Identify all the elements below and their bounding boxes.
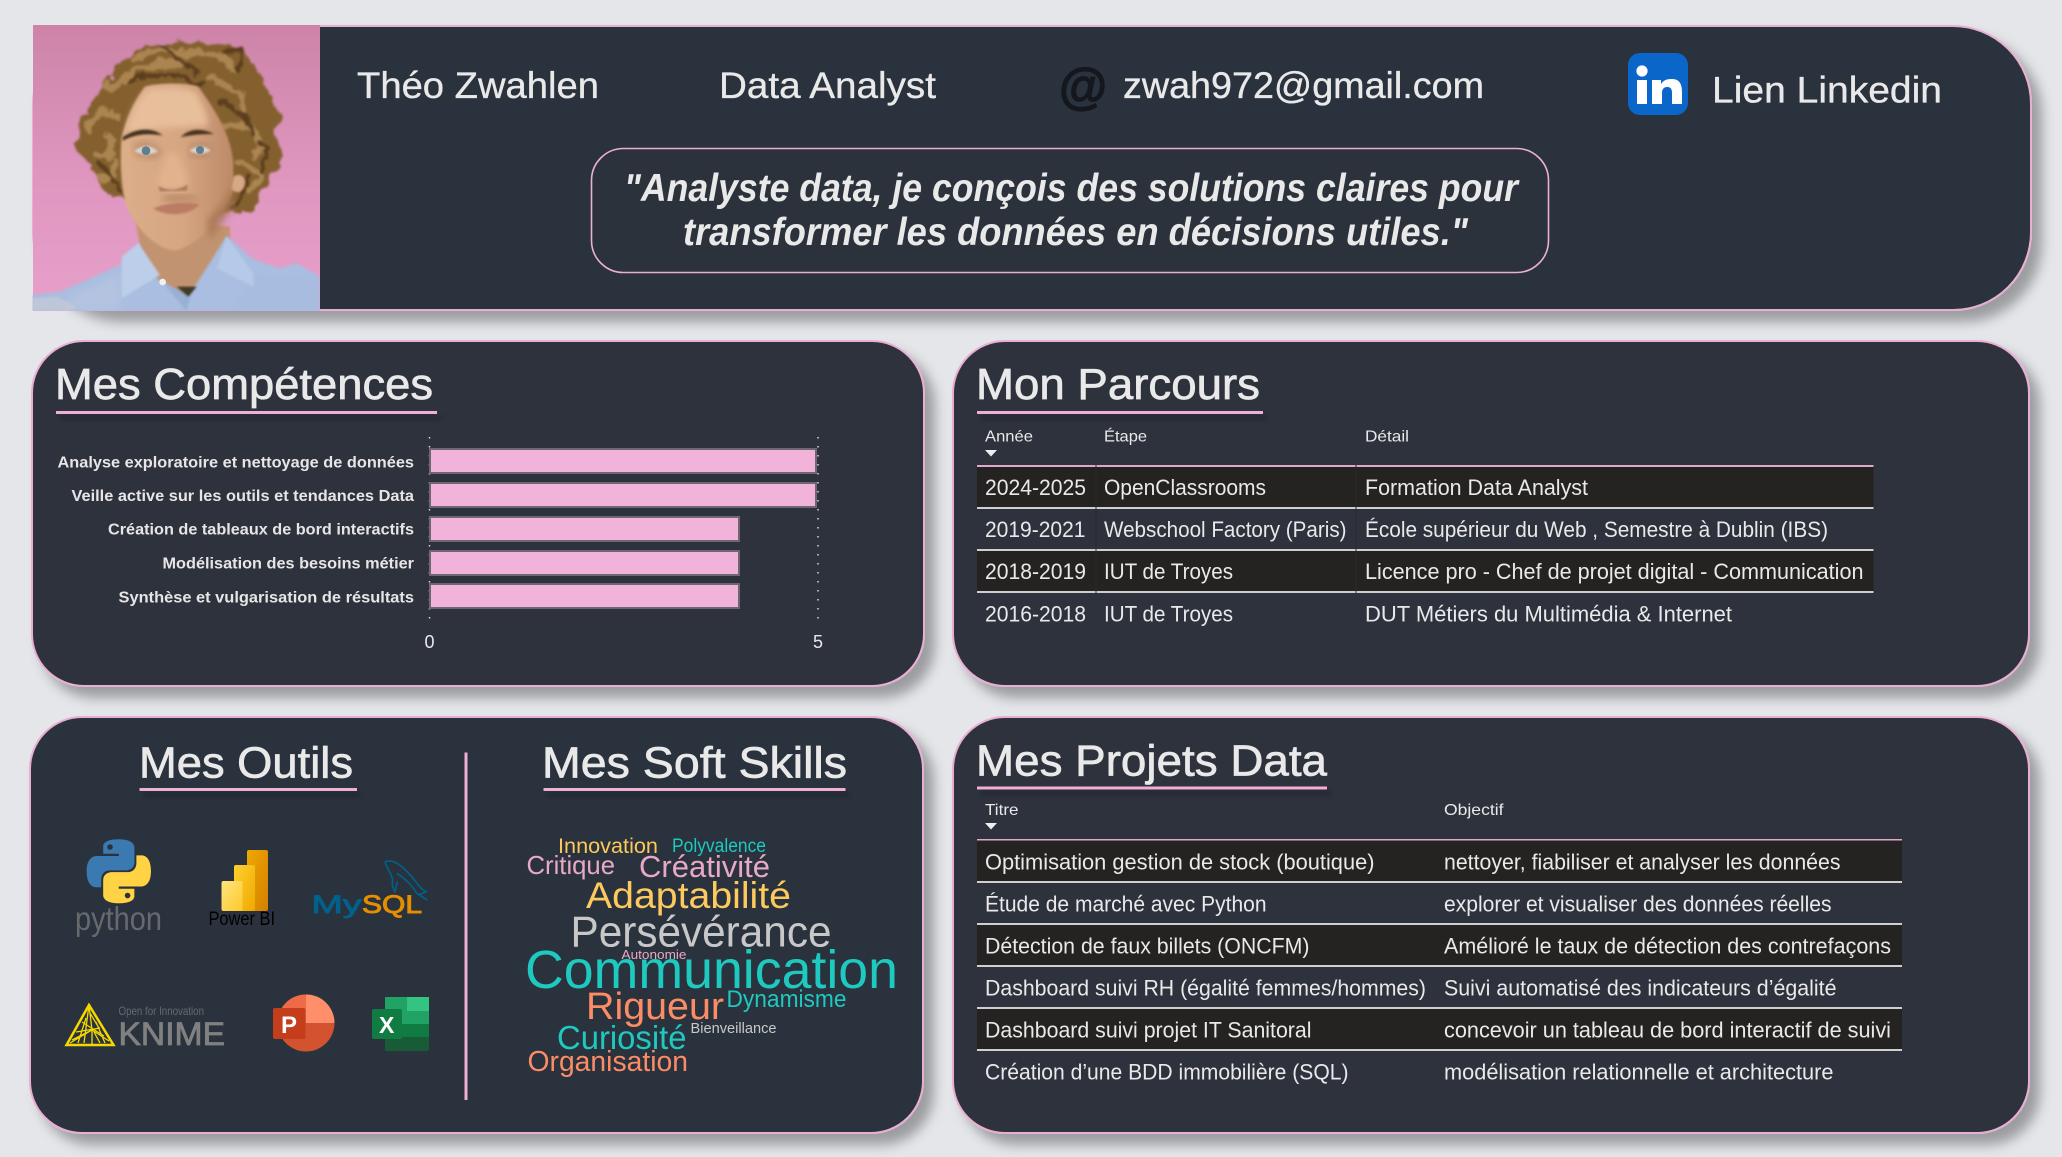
icon: knime: KNIME bbox=[118, 1016, 225, 1052]
word cloud: soft skills: Autonomie bbox=[622, 947, 686, 962]
table: parcours: Licence pro - Chef de projet digital - Communication bbox=[1365, 559, 1864, 584]
table: projets: Dashboard suivi projet IT Sanitoral bbox=[985, 1018, 1312, 1042]
table: projets: concevoir un tableau de bord interactif de suivi bbox=[1444, 1018, 1891, 1042]
table: projets: nettoyer, fiabiliser et analyser les données bbox=[1444, 850, 1840, 874]
panel: header bbox=[32, 25, 2031, 311]
table: projets: Détection de faux billets (ONCFM) bbox=[985, 934, 1310, 958]
icon: linkedin bbox=[1628, 53, 1688, 115]
bar chart: skills: Création de tableaux de bord interactifs bbox=[108, 522, 414, 538]
panel: outils and soft skills bbox=[30, 717, 923, 1133]
job title: Data Analyst bbox=[719, 65, 937, 106]
table: parcours: IUT de Troyes bbox=[1104, 559, 1233, 584]
word cloud: soft skills bbox=[525, 835, 898, 1078]
word cloud: soft skills: Communication bbox=[525, 940, 898, 1000]
word cloud: soft skills: Critique bbox=[526, 850, 615, 880]
table: parcours: Année bbox=[985, 428, 1033, 446]
table: parcours bbox=[977, 426, 1874, 626]
icon: excel: X bbox=[379, 1012, 395, 1038]
icon: python bbox=[75, 839, 162, 937]
table: parcours: 2019-2021 bbox=[985, 517, 1086, 542]
table: parcours: IUT de Troyes bbox=[1104, 602, 1233, 626]
email: zwah972@gmail.com bbox=[1123, 65, 1484, 106]
icon: power bi bbox=[208, 850, 275, 930]
hair mass is shaped by the curl filter bbox=[77, 43, 281, 220]
name: Théo Zwahlen bbox=[357, 65, 599, 106]
icon: mysql bbox=[312, 861, 427, 919]
bar chart: skills: Analyse exploratoire et nettoyage de données bbox=[58, 454, 414, 472]
photo: portrait bbox=[32, 25, 320, 311]
table: parcours: 2018-2019 bbox=[985, 559, 1086, 584]
word cloud: soft skills: Rigueur bbox=[586, 986, 724, 1028]
table: parcours: 2016-2018 bbox=[985, 602, 1086, 626]
callout: quote bbox=[592, 148, 1548, 272]
panel: competences bbox=[32, 341, 924, 686]
table: parcours: Webschool Factory (Paris) bbox=[1104, 517, 1346, 542]
heading: projets: Mes Projets Data bbox=[976, 736, 1328, 786]
table: parcours: OpenClassrooms bbox=[1104, 475, 1266, 500]
panel: parcours bbox=[953, 341, 2029, 686]
word cloud: soft skills: Persévérance bbox=[570, 908, 832, 956]
table: projets: explorer et visualiser des données réelles bbox=[1444, 892, 1832, 916]
table: parcours: Étape bbox=[1104, 426, 1147, 446]
word cloud: soft skills: Créativité bbox=[639, 849, 770, 884]
table: projets: Optimisation gestion de stock (boutique) bbox=[985, 850, 1374, 874]
table: projets: Titre bbox=[985, 802, 1019, 819]
bar chart: skills bbox=[58, 437, 823, 652]
icon: powerpoint bbox=[273, 994, 334, 1052]
table: parcours: Formation Data Analyst bbox=[1365, 475, 1588, 500]
callout: quote: transformer les données en décisions utiles." bbox=[683, 211, 1468, 254]
word cloud: soft skills: Dynamisme bbox=[726, 986, 846, 1013]
table: projets: Amélioré le taux de détection des contrefaçons bbox=[1444, 934, 1891, 958]
heading: outils: Mes Outils bbox=[139, 738, 353, 788]
table: projets: modélisation relationnelle et architecture bbox=[1444, 1060, 1834, 1084]
word cloud: soft skills: Bienveillance bbox=[690, 1020, 776, 1037]
bar chart: skills: 5 bbox=[813, 632, 823, 652]
heading: competences: Mes Compétences bbox=[55, 360, 433, 409]
icon: knime: Open for Innovation bbox=[118, 1004, 204, 1018]
icon: excel bbox=[372, 997, 429, 1051]
icon: knime bbox=[66, 1004, 225, 1052]
icon: mysql: SQL bbox=[362, 891, 422, 919]
icon: python: python bbox=[75, 900, 162, 937]
callout: quote: "Analyste data, je conçois des solutions claires pour bbox=[624, 167, 1520, 210]
table: projets: Création d’une BDD immobilière (SQL) bbox=[985, 1060, 1348, 1084]
icon: power bi: Power BI bbox=[208, 909, 275, 930]
bar chart: skills: Veille active sur les outils et tendances Data bbox=[72, 488, 414, 505]
table: parcours: DUT Métiers du Multimédia & Internet bbox=[1365, 602, 1732, 626]
table: projets: Étude de marché avec Python bbox=[985, 892, 1266, 916]
bar chart: skills: 0 bbox=[424, 632, 435, 652]
icon: powerpoint: P bbox=[281, 1012, 297, 1039]
bar chart: skills: Modélisation des besoins métier bbox=[162, 556, 414, 572]
linkedin link: Lien Linkedin bbox=[1712, 70, 1942, 110]
icon: mysql: My bbox=[312, 891, 362, 919]
panel: projets bbox=[953, 717, 2029, 1133]
table: projets: Suivi automatisé des indicateurs d’égalité bbox=[1444, 976, 1836, 1000]
word cloud: soft skills: Curiosité bbox=[557, 1019, 686, 1056]
table: parcours: École supérieur du Web , Semestre à Dublin (IBS) bbox=[1365, 517, 1828, 542]
table: parcours: 2024-2025 bbox=[985, 475, 1086, 500]
heading: parcours: Mon Parcours bbox=[976, 360, 1260, 409]
table: projets: Objectif bbox=[1444, 802, 1504, 819]
word cloud: soft skills: Adaptabilité bbox=[586, 875, 791, 916]
icon: at sign: @ bbox=[1059, 58, 1107, 114]
word cloud: soft skills: Innovation bbox=[558, 835, 658, 858]
table: projets: Dashboard suivi RH (égalité femmes/hommes) bbox=[985, 976, 1426, 1000]
word cloud: soft skills: Organisation bbox=[528, 1046, 688, 1078]
table: parcours: Détail bbox=[1365, 428, 1409, 446]
table: projets bbox=[977, 802, 1902, 1084]
heading: soft skills: Mes Soft Skills bbox=[542, 738, 847, 788]
bar chart: skills: Synthèse et vulgarisation de résultats bbox=[118, 590, 414, 606]
divider bbox=[464, 752, 468, 1100]
word cloud: soft skills: Polyvalence bbox=[672, 836, 766, 857]
